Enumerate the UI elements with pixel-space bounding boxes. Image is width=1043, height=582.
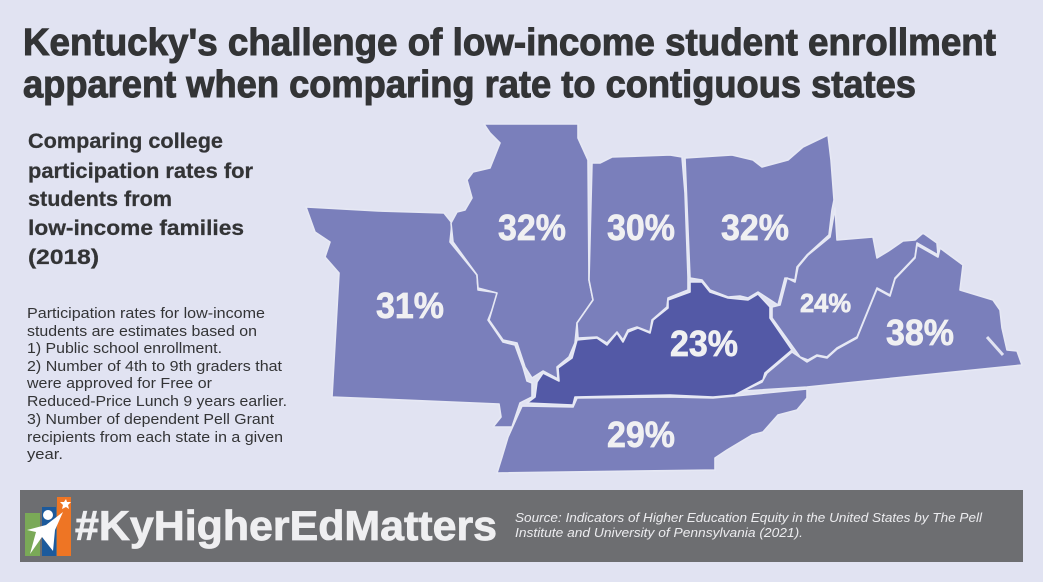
methodology text block: students are estimates based on (27, 324, 257, 340)
subtitle: comparing college participation rates: (2018) (28, 245, 99, 269)
state: West Virginia (772, 208, 938, 360)
methodology text block: 1) Public school enrollment. (27, 341, 222, 357)
hashtag: #KyHigherEdMatters (75, 502, 497, 549)
subtitle: comparing college participation rates: Comparing college (28, 129, 223, 153)
title: apparent when comparing rate to contiguous states (23, 64, 916, 106)
label: West Virginia 24%: 24% (800, 288, 851, 318)
title: Kentucky's challenge of low-income student enrollment (23, 22, 996, 64)
methodology text block: Reduced-Price Lunch 9 years earlier. (27, 394, 287, 410)
source note (515, 511, 983, 540)
label: Virginia 38%: 38% (886, 312, 954, 353)
state: Kentucky (527, 282, 792, 405)
state: Virginia (743, 245, 1022, 391)
methodology text block: 3) Number of dependent Pell Grant (27, 412, 274, 428)
decorative bay (987, 337, 1003, 355)
state: Missouri (306, 207, 532, 427)
methodology text block: year. (27, 447, 63, 463)
methodology text block: were approved for Free or (26, 376, 212, 392)
label: Illinois 32%: 32% (498, 207, 566, 248)
label: Missouri 31%: 31% (376, 285, 444, 326)
methodology text block: 2) Number of 4th to 9th graders that (27, 359, 282, 375)
state: Illinois (451, 124, 593, 379)
subtitle: comparing college participation rates: participation rates for (28, 159, 254, 183)
source note: Institute and University of Pennsylvania (2021). (515, 526, 803, 540)
source note: Source: Indicators of Higher Education Equity in the United States by The Pell (515, 511, 983, 525)
methodology text block: recipients from each state in a given (27, 430, 283, 446)
footer bar (20, 490, 1023, 562)
map of Kentucky and contiguous states (306, 124, 1022, 473)
label: Kentucky 23%: 23% (670, 323, 738, 364)
state: Indiana (577, 155, 688, 343)
label: Indiana 30%: 30% (607, 207, 675, 248)
subtitle: comparing college participation rates: low-income families (28, 216, 244, 240)
state: Ohio (685, 135, 834, 305)
icon: logo (25, 497, 71, 556)
methodology text block: Participation rates for low-income (27, 306, 265, 322)
methodology text block (26, 306, 287, 463)
subtitle: comparing college participation rates (28, 129, 254, 269)
title (23, 22, 996, 106)
label: Tennessee 29%: 29% (607, 414, 675, 455)
subtitle: comparing college participation rates: students from (28, 187, 172, 211)
label: Ohio 32%: 32% (721, 207, 789, 248)
state: Tennessee (497, 389, 807, 473)
